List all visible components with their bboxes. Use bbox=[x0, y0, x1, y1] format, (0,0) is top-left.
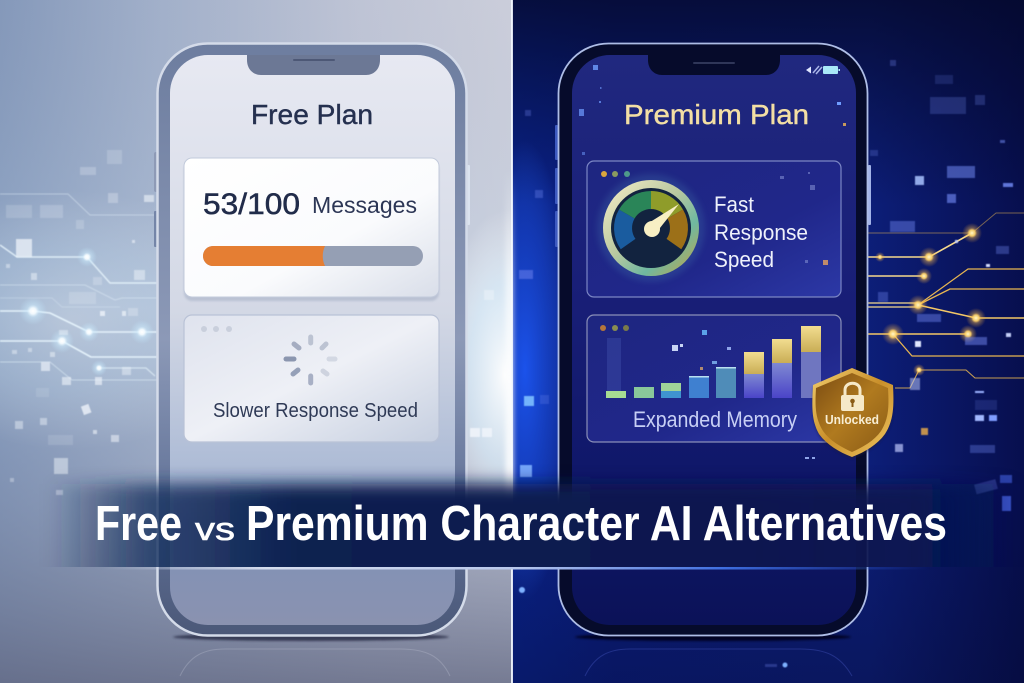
status icons bbox=[806, 66, 840, 74]
circuit traces: free side bbox=[0, 194, 157, 380]
icon: loading spinner bbox=[286, 337, 335, 383]
phone: premium plan bbox=[555, 44, 871, 636]
memory label: Expanded Memory bbox=[633, 407, 797, 432]
message count: 53/100 bbox=[203, 188, 300, 221]
speed label bbox=[714, 192, 808, 272]
icon: padlock bbox=[841, 383, 864, 411]
window dots bbox=[600, 325, 629, 331]
central divider glow bbox=[506, 0, 513, 683]
circuit nodes: premium side bbox=[875, 223, 986, 376]
window dots bbox=[601, 171, 630, 177]
window dots bbox=[201, 326, 232, 332]
heading: Premium Plan: Premium Plan bbox=[624, 99, 809, 130]
title banner bbox=[50, 484, 1020, 584]
banner rule bbox=[100, 567, 930, 570]
speed label: Response bbox=[714, 220, 808, 245]
card: slower response bbox=[184, 315, 439, 442]
circuit nodes: free side bbox=[19, 247, 154, 376]
badge label: Unlocked bbox=[825, 413, 879, 427]
screen particles bbox=[579, 65, 846, 459]
badge: unlocked shield bbox=[812, 368, 893, 459]
title text: Free bbox=[95, 497, 182, 551]
gauge needle bbox=[644, 204, 679, 237]
data particles: free side bbox=[6, 150, 494, 495]
bar chart bbox=[606, 326, 821, 398]
heading: Free Plan: Free Plan bbox=[251, 99, 373, 130]
background: premium side bbox=[477, 0, 1024, 683]
progress bar bbox=[203, 246, 423, 266]
phone body: free bbox=[154, 44, 470, 636]
icon: speed gauge bbox=[597, 174, 705, 282]
background: free side bbox=[0, 0, 512, 683]
speed label: Slower Response Speed bbox=[213, 400, 418, 422]
card: message usage bbox=[184, 158, 439, 301]
speed label: Speed bbox=[714, 247, 774, 272]
card: expanded memory bbox=[587, 315, 841, 442]
phone body: premium bbox=[555, 44, 871, 636]
card: fast response bbox=[587, 161, 841, 297]
floor shadows and reflections bbox=[173, 633, 852, 676]
messages label: Messages bbox=[312, 192, 417, 218]
phone: free plan bbox=[154, 44, 470, 636]
title: vs: vs bbox=[195, 511, 235, 547]
speed label: Fast bbox=[714, 192, 754, 217]
circuit traces: premium side bbox=[820, 213, 1024, 388]
data particles: premium side bbox=[519, 60, 1013, 668]
